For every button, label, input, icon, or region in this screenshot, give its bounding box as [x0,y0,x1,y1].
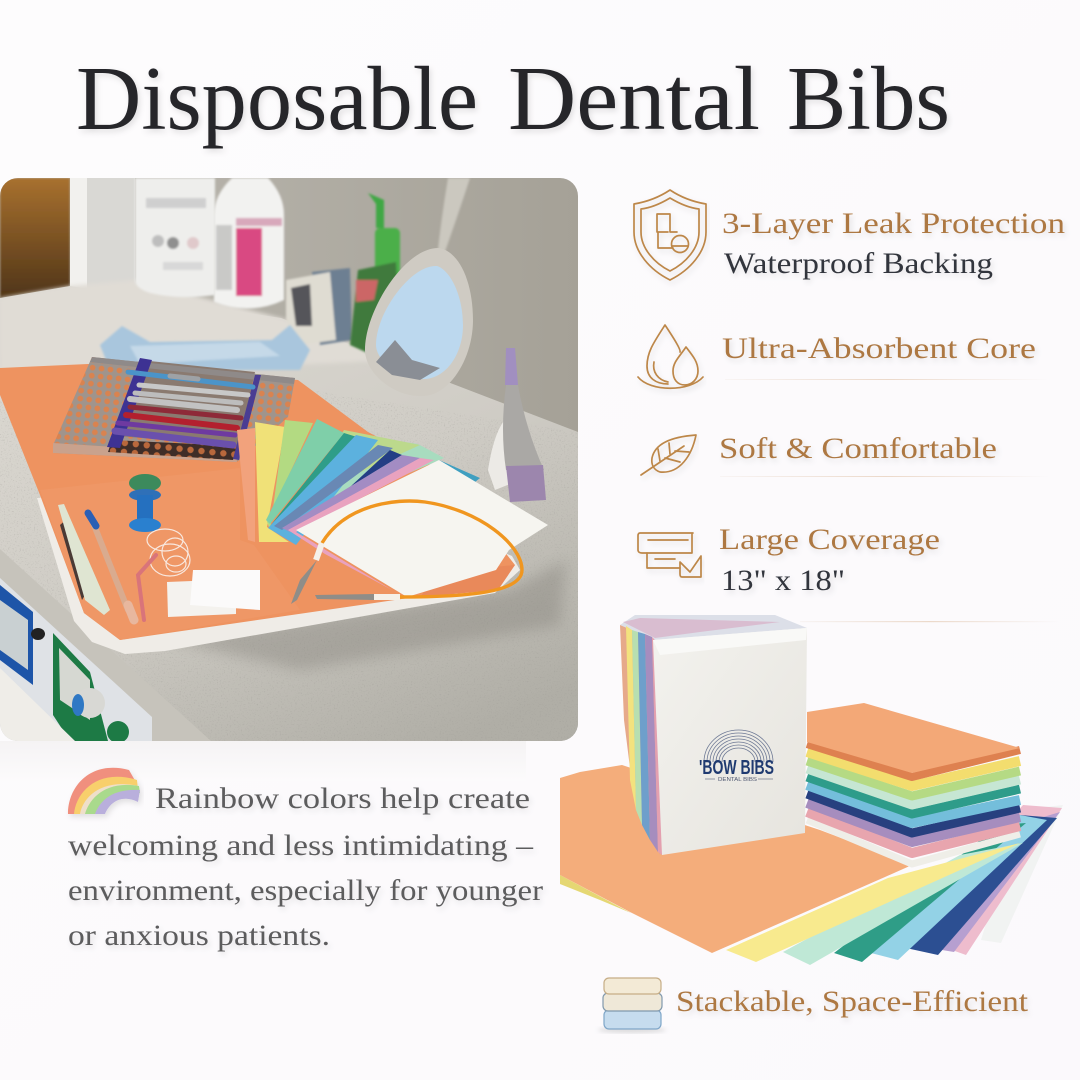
disinfectant bottle [214,178,284,309]
orange bib [0,364,515,640]
heading: Soft & Comfortable [719,432,997,465]
cassette rails [107,358,152,448]
under sheet yellow edge [560,875,631,913]
feature: soft and comfortable [641,432,1050,477]
text block: rainbow colors note: Rainbow colors help create [155,782,530,815]
rainbow bib fan [237,419,548,597]
logo: Bow Bibs: DENTAL BIBS [718,777,757,783]
title: Bibs [787,48,950,149]
elastic loops [147,529,190,576]
heading: Large Coverage [719,523,940,556]
heading: 3-Layer Leak Protection [722,207,1065,240]
feature: large coverage [638,523,1060,622]
icon: folded bibs [638,533,701,577]
icon: leaf [641,435,696,475]
title [76,48,950,149]
saliva ejector [88,513,156,620]
soap pump bottle [350,193,400,355]
instruments [115,372,253,445]
logo: Bow Bibs [699,730,774,783]
caption: stackable: Stackable, Space-Efficient [676,985,1029,1018]
gauze pads [167,570,260,617]
logo: Bow Bibs: 'BOW BIBS [699,757,774,779]
text block: rainbow colors note: or anxious patients. [68,919,330,952]
tray shadow [170,560,566,670]
blue spool [129,474,161,532]
fanned bibs [726,805,1063,965]
wrapped pack [620,615,807,855]
text block: rainbow colors note [68,782,543,952]
text block: rainbow colors note: environment, especially for younger [68,874,543,907]
text block: rainbow colors note: welcoming and less intimidating – [68,829,534,862]
tray [37,498,520,654]
wipes tub [135,178,215,297]
instrument cassette [53,357,295,462]
stacked bibs [807,744,1020,864]
scaler handpiece [488,348,546,502]
counter front edge [0,549,211,741]
heading: Ultra-Absorbent Core [722,332,1036,365]
icon: water drops [638,325,703,388]
title: Dental [508,48,760,149]
dental unit [0,578,152,743]
feature: leak protection [634,190,1065,280]
blood pressure monitor [286,268,352,345]
icon: rainbow [68,768,140,814]
subheading: Waterproof Backing [724,247,993,280]
feature: absorbent core [638,325,1050,388]
orange flat bib [560,765,912,953]
panel: clinic photo [0,178,578,743]
title: Disposable [76,48,478,149]
sterilisation pouch [100,325,310,370]
icon: stacked layers [598,978,666,1033]
size: 13" x 18" [721,564,845,597]
counter top [0,280,578,741]
hand mirror [365,178,473,396]
orange tube and clips [291,501,522,604]
panel: product photo [560,615,1063,965]
icon: shield [634,190,706,280]
instruction packet [58,504,110,615]
doorway [0,178,70,300]
photo reflection fade [0,741,526,781]
door frame [87,178,135,286]
